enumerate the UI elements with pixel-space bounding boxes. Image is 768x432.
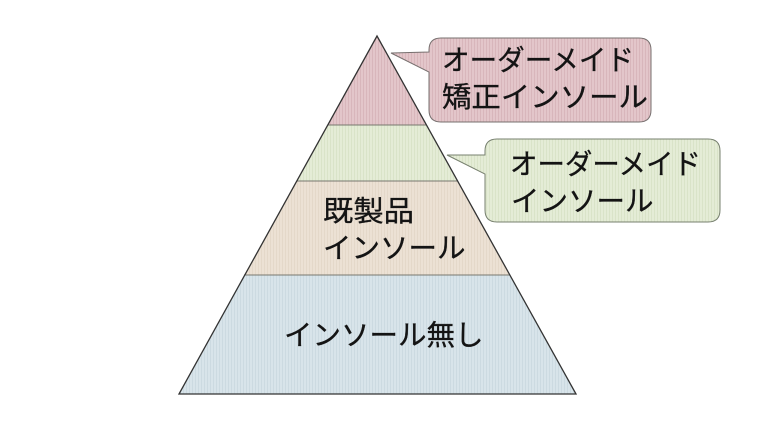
callout: オーダーメイドインソール <box>447 139 720 222</box>
pyramid tier: インソール無し: インソール無し <box>284 320 484 352</box>
pyramid tier: 既製品インソール <box>244 181 510 275</box>
callout: オーダーメイドインソール: オーダーメイド <box>510 149 701 181</box>
callout: オーダーメイド矯正インソール: オーダーメイド <box>442 45 634 77</box>
pyramid tier: オーダーメイド矯正インソール <box>328 36 426 125</box>
pyramid tier: インソール無し <box>179 275 576 394</box>
callout: オーダーメイド矯正インソール: 矯正インソール <box>442 82 648 114</box>
pyramid outline <box>179 36 576 394</box>
pyramid tier: 既製品インソール: 既製品 <box>323 196 414 228</box>
callout: オーダーメイド矯正インソール <box>391 38 651 122</box>
pyramid tier: 既製品インソール: インソール <box>323 233 466 265</box>
pyramid tier: オーダーメイドインソール <box>297 125 457 181</box>
callout: オーダーメイドインソール: インソール <box>511 186 654 218</box>
